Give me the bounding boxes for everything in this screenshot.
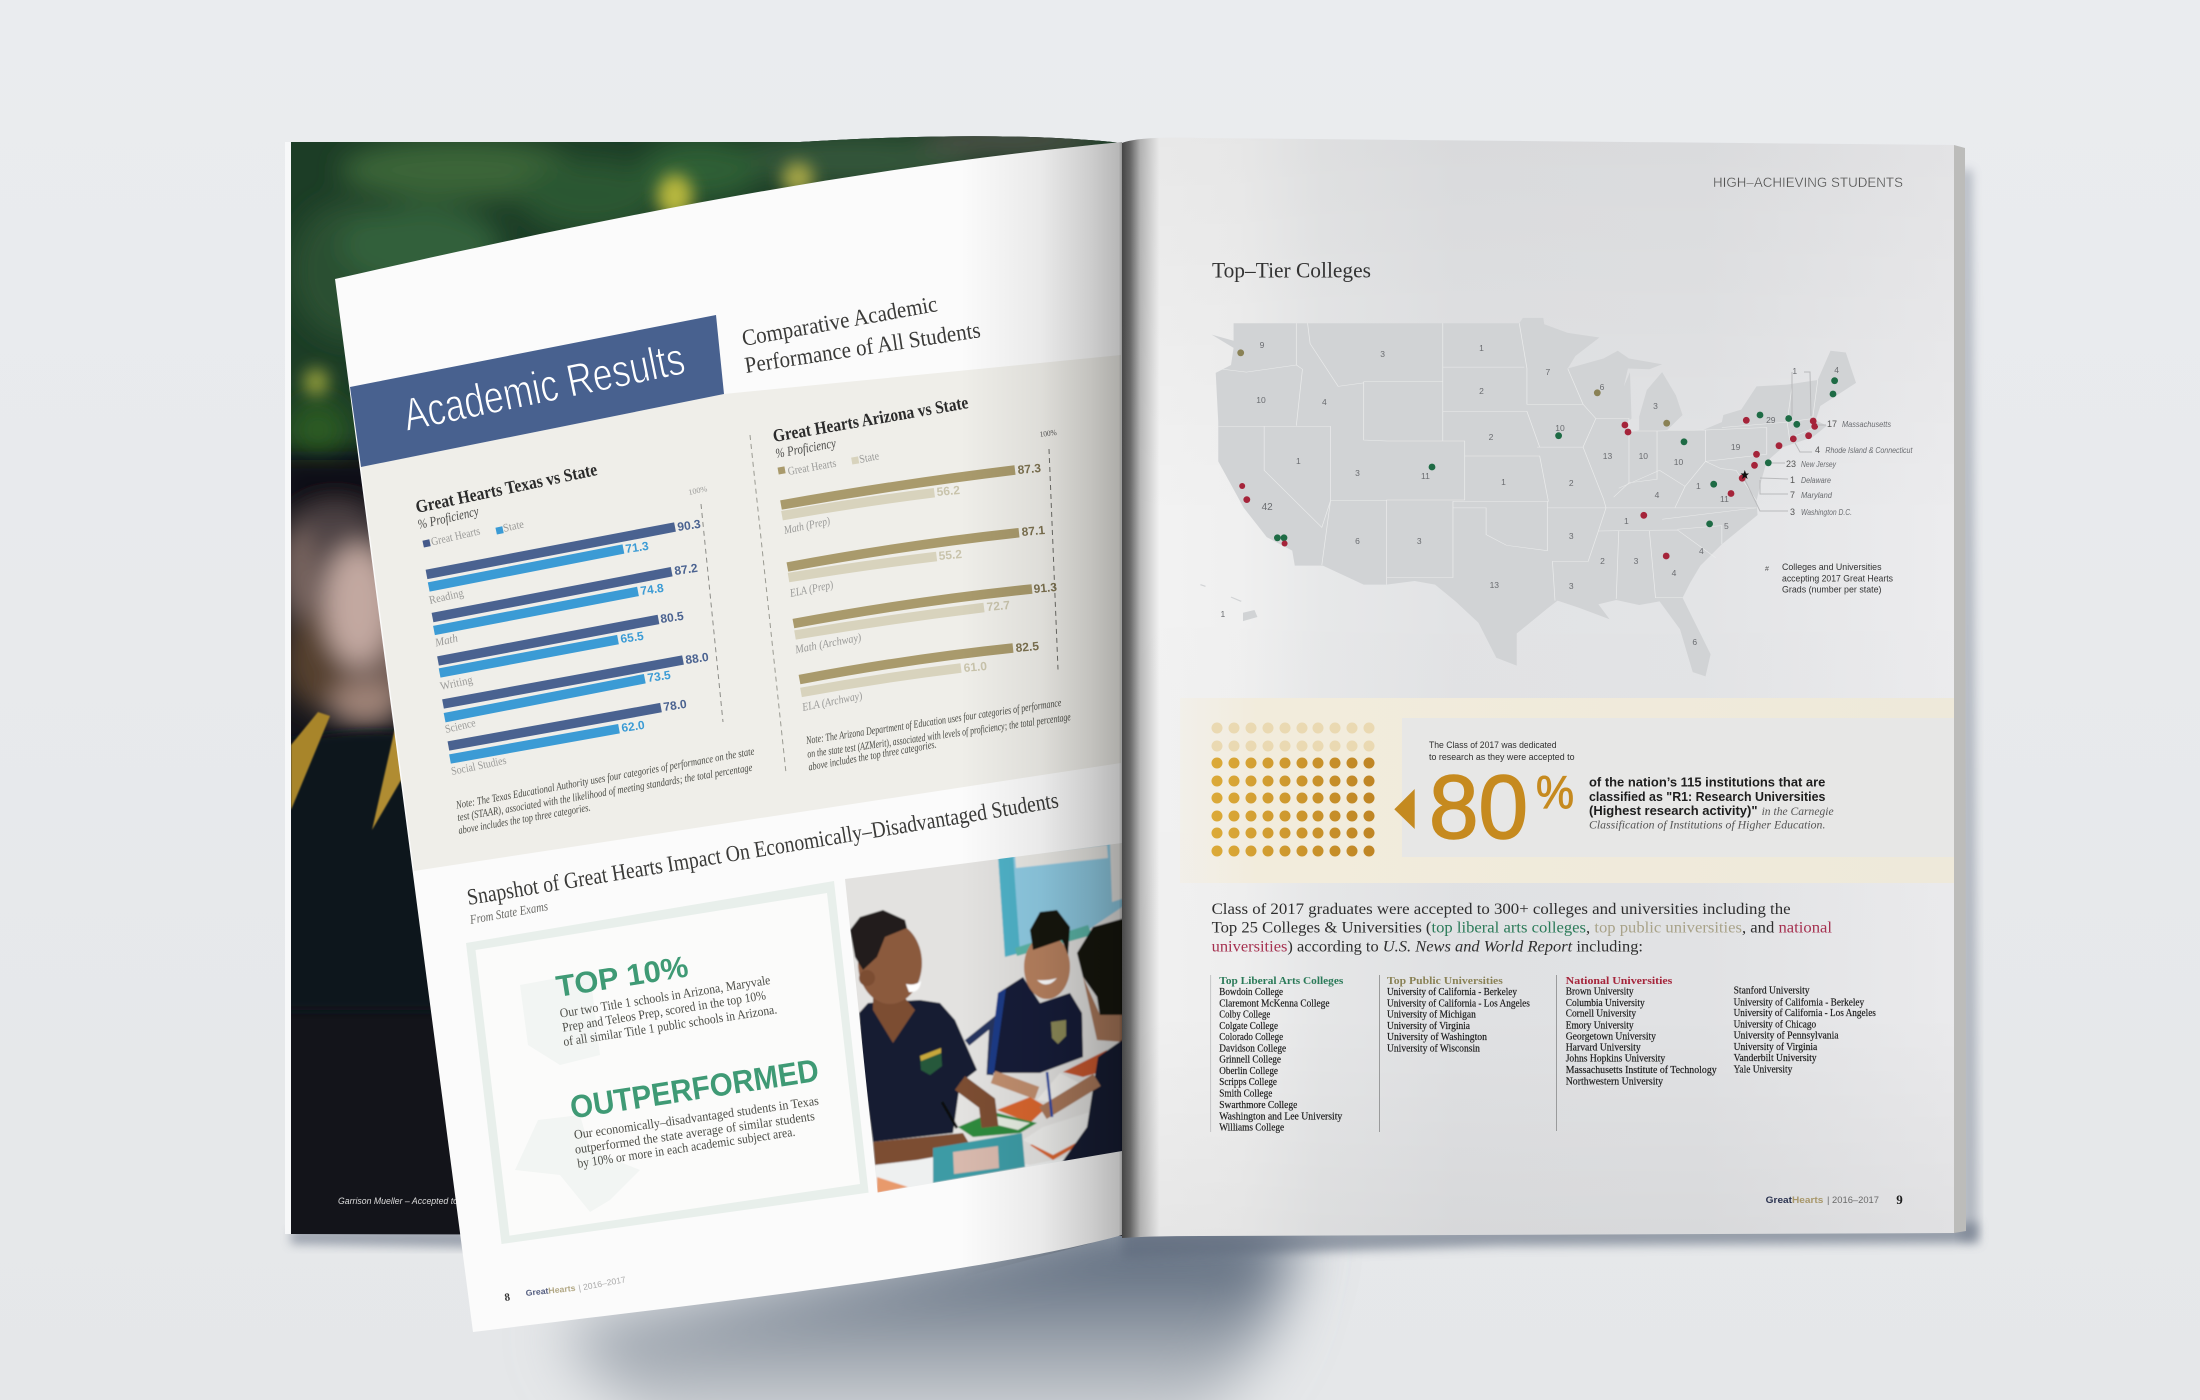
state counts: 4: [1699, 546, 1704, 556]
eastern state callouts: Massachusetts: [1842, 420, 1891, 429]
right page: sheet: [1122, 138, 1954, 1238]
list: Top Liberal Arts Colleges: Washington and Lee University: [1219, 1111, 1342, 1122]
list: National Universities: Emory University: [1566, 1020, 1634, 1031]
panel: 80% research callout: [1180, 698, 1954, 883]
legend: State: [858, 450, 880, 466]
legend: [778, 450, 880, 478]
state counts: 3: [1355, 468, 1360, 478]
left page: blurred graduate photo: [291, 136, 1122, 1236]
list: National Universities: Stanford University: [1734, 986, 1810, 997]
category labels: [782, 515, 864, 714]
spine shading on left page: [960, 142, 1122, 1278]
state counts: 13: [1490, 580, 1499, 590]
list: Top Public Universities: Top Public Universities: [1387, 975, 1504, 987]
bars: [426, 527, 683, 759]
callout description: Classification of Institutions of Higher Education.: [1589, 818, 1825, 832]
bar values: 80.5: [659, 609, 685, 626]
bar values: [619, 517, 710, 735]
stat: Top 10%: Our two Title 1 schools in Arizona, Maryvale: [559, 972, 771, 1021]
state counts: 6: [1692, 637, 1697, 647]
stat: Top 10%: Prep and Teleos Prep, scored in the top 10%: [561, 987, 767, 1035]
banner: Academic Results: [350, 315, 724, 467]
list: National Universities: Vanderbilt University: [1734, 1053, 1817, 1064]
list: National Universities: University of Pennsylvania: [1734, 1031, 1839, 1042]
category labels: [428, 587, 508, 778]
callout description: [1589, 776, 1834, 832]
list: Top Liberal Arts Colleges: Grinnell College: [1219, 1054, 1282, 1065]
state counts: 4: [1672, 568, 1677, 578]
state counts: 13: [1603, 451, 1612, 461]
callout intro: to research as they were accepted to: [1429, 752, 1574, 763]
stat: Outperformed: outperformed the state average of similar students: [574, 1108, 816, 1157]
stat: 80%: [1429, 758, 1574, 858]
legend: State: [502, 519, 525, 535]
state counts: 1: [1296, 456, 1301, 466]
state counts: 4: [1655, 490, 1660, 500]
state counts: 6: [1355, 536, 1360, 546]
icon: Texas silhouette: [515, 1115, 640, 1212]
state counts: 4: [1322, 397, 1327, 407]
state counts: 1: [1221, 609, 1226, 619]
eastern state callouts: 23: [1786, 459, 1796, 469]
map legend: #: [1765, 566, 1769, 573]
bar values: 61.0: [963, 659, 988, 675]
list: Top Public Universities: University of California - Los Angeles: [1387, 999, 1530, 1010]
stat: Top 10%: of all similar Title 1 public schools in Arizona.: [562, 1001, 778, 1049]
text block: acceptance summary: Class of 2017 graduates were accepted to 300+ colleges and universities including the: [1212, 901, 1791, 918]
list: Top Liberal Arts Colleges: Claremont McKenna College: [1219, 999, 1330, 1010]
chart: Great Hearts Arizona vs State: [771, 392, 1072, 773]
callout description: classified as "R1: Research Universities: [1589, 790, 1825, 804]
state counts: 4: [1834, 365, 1839, 375]
list: Top Public Universities: [1387, 975, 1530, 1055]
text block: acceptance summary: Top 25 Colleges & Universities ( top liberal arts colleges , top public universities , and national: [1212, 920, 1833, 937]
state counts: 2: [1569, 478, 1574, 488]
list: National Universities: University of California - Berkeley: [1734, 997, 1864, 1008]
state counts: 3: [1417, 536, 1422, 546]
stat: Top 10%: TOP 10%: [554, 951, 690, 1004]
callout description: (Highest research activity)": [1589, 804, 1758, 818]
legend: [422, 519, 525, 548]
state counts: 11: [1720, 494, 1729, 504]
list: National Universities: University of Chicago: [1734, 1020, 1816, 1031]
state counts: 10: [1674, 457, 1683, 467]
list: Top Liberal Arts Colleges: Swarthmore College: [1219, 1100, 1298, 1111]
state counts: 1: [1479, 343, 1484, 353]
eastern state callouts: 1: [1790, 475, 1795, 485]
category labels: Science: [444, 717, 477, 736]
list: National Universities: Yale University: [1734, 1064, 1792, 1075]
chart: Great Hearts Texas vs State: [414, 459, 755, 837]
list: Top Liberal Arts Colleges: Smith College: [1219, 1088, 1273, 1099]
list: National Universities: Brown University: [1566, 986, 1634, 997]
map shape: [1200, 318, 1856, 676]
list: National Universities: [1566, 975, 1876, 1087]
list: Top Liberal Arts Colleges: [1219, 975, 1344, 1134]
axis caption: % Proficiency: [416, 503, 480, 532]
text block: acceptance summary: [1212, 901, 1833, 956]
category labels: Social Studies: [450, 755, 508, 778]
eastern state callouts: [1745, 372, 1913, 517]
state counts: 5: [1724, 521, 1729, 531]
bars: [781, 470, 1032, 692]
icon: Arizona silhouette: [520, 972, 600, 1065]
eastern state callouts: Washington D.C.: [1801, 508, 1852, 517]
stat: 80%: 80: [1429, 758, 1528, 858]
list: National Universities: Johns Hopkins University: [1566, 1054, 1665, 1065]
panel: results frame: [466, 881, 869, 1244]
legend: Great Hearts: [787, 458, 838, 478]
axis caption: % Proficiency: [774, 435, 837, 461]
left page footer: 8: [504, 1291, 511, 1304]
bar values: 65.5: [619, 629, 645, 646]
category labels: ELA (Archway): [800, 690, 864, 714]
heading: Top-Tier Colleges: Top–Tier Colleges: [1212, 258, 1371, 282]
state counts: 42: [1262, 502, 1273, 513]
right page footer: 9: [1896, 1192, 1903, 1207]
section tag: HIGH–ACHIEVING STUDENTS: [1713, 174, 1903, 190]
heading: Snapshot: From State Exams: [468, 898, 549, 927]
list: Top Liberal Arts Colleges: Oberlin College: [1219, 1066, 1279, 1077]
chart: Great Hearts Arizona vs State: 100%: [1039, 428, 1057, 439]
state counts: 3: [1569, 581, 1574, 591]
eastern state callouts: 17: [1827, 419, 1837, 429]
state counts: 2: [1489, 432, 1494, 442]
list: National Universities: Georgetown University: [1566, 1031, 1656, 1042]
legend: Great Hearts: [430, 525, 482, 548]
photo: students at a table: [840, 840, 1125, 1200]
bar values: 71.3: [624, 539, 650, 556]
state counts: 7: [1546, 367, 1551, 377]
map legend: Grads (number per state): [1782, 584, 1882, 596]
bar values: 73.5: [646, 668, 672, 685]
list: National Universities: National Universities: [1566, 975, 1673, 987]
list: Top Public Universities: University of Virginia: [1387, 1021, 1471, 1032]
state counts: 3: [1380, 349, 1385, 359]
eastern state callouts: 3: [1790, 507, 1795, 517]
bar values: 87.1: [1021, 523, 1046, 539]
brochure cast shadow: [291, 170, 1978, 1400]
state counts: 1: [1792, 366, 1797, 376]
list: Top Liberal Arts Colleges: Colgate College: [1219, 1021, 1278, 1032]
bar values: 74.8: [639, 581, 665, 598]
list: National Universities: Columbia University: [1566, 998, 1645, 1009]
left page footer: [504, 1274, 627, 1304]
left page: white sheet: [335, 142, 1122, 1332]
chart note: on the state test (AZMerit), associated with levels of proficiency; the total percentage: [806, 711, 1072, 761]
dot grid: [1212, 722, 1374, 856]
bar values: 55.2: [938, 547, 963, 563]
heading: Snapshot: [465, 787, 1060, 927]
chart note: above includes the top three categories.: [807, 739, 937, 773]
chart note: test (STAAR), associated with the likelihood of meeting standards; the total percentage: [456, 762, 753, 824]
state counts: 6: [1600, 382, 1605, 392]
list: Top Liberal Arts Colleges: Top Liberal Arts Colleges: [1219, 975, 1344, 987]
bar values: 91.3: [1033, 580, 1058, 596]
bar values: 88.0: [684, 650, 710, 667]
map legend: Colleges and Universities: [1782, 562, 1882, 573]
state counts: 1: [1624, 516, 1629, 526]
eastern state callouts: 7: [1790, 490, 1795, 500]
chart title: Great Hearts Arizona vs State: [771, 392, 970, 446]
chart note: Note: The Texas Educational Authority uses four categories of performance on the state: [454, 746, 755, 812]
list: National Universities: Cornell University: [1566, 1009, 1636, 1020]
bar values: 56.2: [936, 483, 961, 499]
list: National Universities: Massachusetts Institute of Technology: [1566, 1065, 1717, 1076]
bar values: 87.3: [1017, 461, 1042, 477]
callout intro: The Class of 2017 was dedicated: [1429, 740, 1556, 751]
list: Top Liberal Arts Colleges: Bowdoin College: [1219, 987, 1284, 998]
state counts: 10: [1256, 395, 1266, 405]
state counts: [1221, 340, 1839, 647]
bar values: 90.3: [676, 517, 702, 534]
right page footer: [1766, 1192, 1903, 1207]
heading: Comparative Academic Performance: [740, 291, 982, 378]
chart note: [805, 697, 1072, 773]
state counts: 3: [1569, 531, 1574, 541]
list: Top Liberal Arts Colleges: Colby College: [1219, 1009, 1271, 1020]
callout intro: [1429, 740, 1574, 763]
state counts: 29: [1766, 415, 1776, 425]
bar values: 62.0: [620, 718, 646, 735]
eastern state callouts: 4: [1815, 445, 1820, 455]
right page: stack edge: [1954, 145, 1966, 1233]
bar values: 72.7: [986, 598, 1011, 614]
right page footer: | 2016–2017: [1827, 1195, 1879, 1206]
list: Top Public Universities: University of Washington: [1387, 1032, 1487, 1043]
list: National Universities: University of Virginia: [1734, 1042, 1818, 1053]
heading: Snapshot: Snapshot of Great Hearts Impact On Economically–Disadvantaged Students: [465, 787, 1060, 910]
heading: Comparative Academic Performance: Comparative Academic: [740, 291, 939, 351]
callout description: of the nation’s 115 institutions that are: [1589, 776, 1825, 790]
bar values: [936, 461, 1058, 675]
stat: Outperformed: Our economically–disadvantaged students in Texas: [573, 1093, 820, 1142]
category labels: ELA (Prep): [788, 579, 835, 600]
left page footer: | 2016–2017: [578, 1274, 627, 1293]
state counts: 10: [1639, 451, 1648, 461]
list: National Universities: Northwestern University: [1566, 1076, 1663, 1087]
category labels: Reading: [428, 587, 465, 607]
state counts: 19: [1731, 442, 1741, 452]
map legend: [1765, 562, 1893, 596]
state counts: 1: [1696, 481, 1701, 491]
list: Top Public Universities: University of Michigan: [1387, 1009, 1476, 1020]
stat: 80%: %: [1536, 766, 1574, 818]
list: National Universities: University of California - Los Angeles: [1734, 1008, 1876, 1019]
chart note: above includes the top three categories.: [457, 802, 591, 837]
eastern state callouts: Delaware: [1801, 476, 1831, 485]
banner: Academic Results: Academic Results: [398, 332, 689, 441]
stat: Outperformed: by 10% or more in each academic subject area.: [576, 1124, 796, 1171]
state counts: 9: [1260, 340, 1265, 350]
college dots: [1237, 349, 1838, 559]
map: USA colleges: [1200, 318, 1913, 676]
panel: beige charts band: [361, 355, 1121, 871]
heading: Comparative Academic Performance: Performance of All Students: [743, 317, 982, 378]
stat: Outperformed: OUTPERFORMED: [568, 1052, 821, 1125]
category labels: Writing: [439, 674, 474, 693]
list: National Universities: Harvard University: [1566, 1043, 1641, 1054]
bar values: 87.2: [673, 561, 699, 578]
category labels: Math: [433, 633, 459, 650]
chart note: Note: The Arizona Department of Education uses four categories of performance: [805, 697, 1062, 747]
text block: acceptance summary: universities) according to U.S. News and World Report including:: [1212, 939, 1643, 956]
state counts: 3: [1634, 556, 1639, 566]
white sheet edge behind photo: [285, 142, 291, 1234]
category labels: Math (Prep): [782, 515, 831, 537]
map legend: accepting 2017 Great Hearts: [1782, 574, 1893, 585]
eastern state callouts: Maryland: [1801, 491, 1833, 500]
stat: Top 10%: [554, 951, 778, 1049]
chart title: Great Hearts Texas vs State: [414, 459, 599, 517]
list: Top Liberal Arts Colleges: Williams College: [1219, 1123, 1285, 1134]
left page footer: GreatHearts: [525, 1283, 576, 1298]
bar values: 78.0: [662, 697, 688, 714]
chart note: [454, 746, 755, 837]
state counts: 1: [1501, 477, 1506, 487]
chart: Great Hearts Texas vs State: 100%: [688, 484, 708, 497]
state counts: 3: [1653, 401, 1658, 411]
list: Top Liberal Arts Colleges: Davidson College: [1219, 1044, 1287, 1055]
state counts: 2: [1479, 386, 1484, 396]
eastern state callouts: New Jersey: [1801, 460, 1837, 469]
list: Top Liberal Arts Colleges: Scripps College: [1219, 1077, 1277, 1088]
list: Top Liberal Arts Colleges: Colorado College: [1219, 1032, 1284, 1043]
eastern state callouts: Rhode Island & Connecticut: [1825, 446, 1913, 455]
state counts: 2: [1600, 556, 1605, 566]
state counts: 10: [1555, 423, 1565, 433]
bar values: 82.5: [1015, 639, 1040, 655]
list: Top Public Universities: University of Wisconsin: [1387, 1044, 1480, 1055]
photo caption: Garrison Mueller – Accepted to: [338, 1196, 458, 1207]
category labels: Math (Archway): [793, 632, 862, 657]
callout description: in the Carnegie: [1762, 804, 1834, 818]
state counts: 11: [1421, 471, 1430, 481]
list: Top Public Universities: University of California - Berkeley: [1387, 987, 1517, 998]
stat: Outperformed: [568, 1052, 821, 1171]
arrow: [1394, 789, 1415, 829]
right page footer: GreatHearts: [1766, 1195, 1823, 1206]
